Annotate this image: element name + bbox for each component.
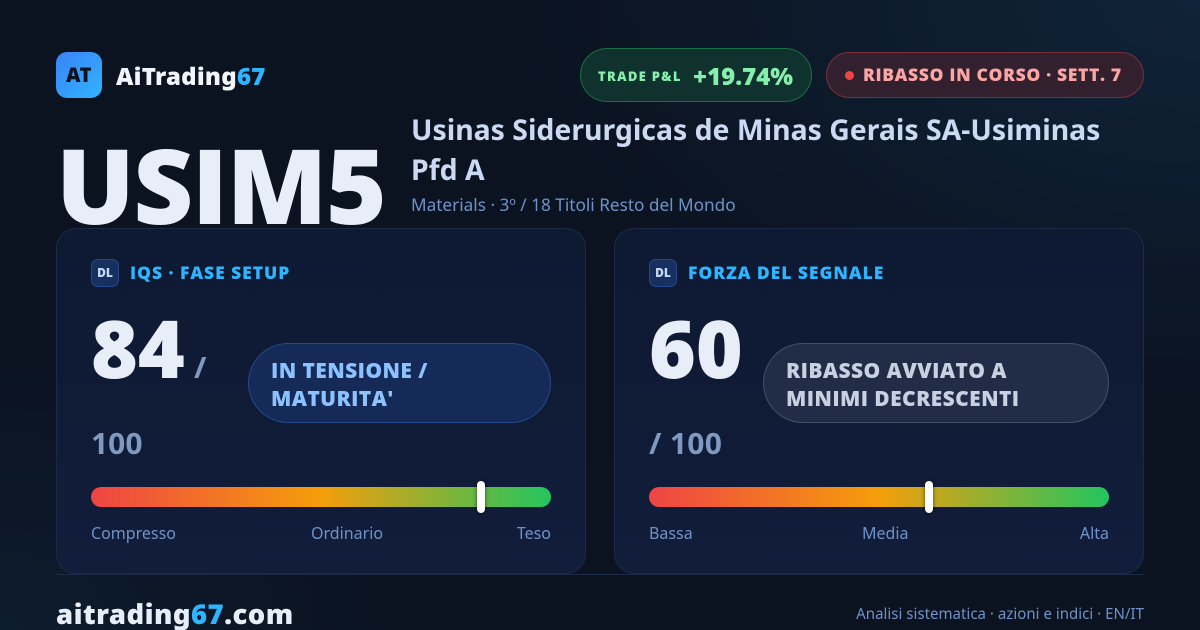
score denominator: / 100: [649, 422, 722, 463]
gauge label low: Compresso: [91, 522, 176, 544]
score slash: /: [194, 346, 206, 387]
gradient gauge: [91, 487, 551, 507]
company name: Pfd A: [411, 151, 485, 189]
status pill: MINIMI DECRESCENTI: [786, 385, 1020, 413]
badge: market status: [826, 52, 1144, 98]
panel: signal strength: [614, 228, 1144, 574]
gauge marker: [925, 481, 933, 513]
gauge label low: Bassa: [649, 522, 693, 544]
footer tagline: Analisi sistematica · azioni e indici · EN/IT: [856, 604, 1144, 624]
status pill: [763, 343, 1109, 423]
status pill: IN TENSIONE /: [271, 357, 428, 385]
gradient gauge: [649, 487, 1109, 507]
gauge marker: [477, 481, 485, 513]
gauge label high: Teso: [517, 522, 551, 544]
footer rule: [56, 574, 1144, 575]
company name: Usinas Siderurgicas de Minas Gerais SA-Usiminas: [411, 111, 1100, 149]
sector line: Materials · 3º / 18 Titoli Resto del Mondo: [411, 194, 736, 217]
panel heading: IQS · FASE SETUP: [130, 261, 290, 285]
gauge label mid: Media: [862, 522, 908, 544]
company name: [411, 111, 1100, 189]
score denominator: 100: [91, 422, 142, 463]
panel: IQS: [56, 228, 586, 574]
icon: DL: [91, 259, 119, 287]
gauge label high: Alta: [1080, 522, 1109, 544]
brand logo: [56, 52, 102, 98]
gauge label mid: Ordinario: [311, 522, 383, 544]
status pill: [248, 343, 551, 423]
icon: DL: [649, 259, 677, 287]
badge: market status: RIBASSO IN CORSO · SETT. 7: [863, 63, 1122, 87]
badge: trade P&L: TRADE P&L: [598, 67, 682, 85]
badge: trade P&L: +19.74%: [693, 60, 793, 93]
status pill: MATURITA': [271, 385, 394, 413]
icon: DL: DL: [655, 264, 671, 281]
status pill: RIBASSO AVVIATO A: [786, 357, 1007, 385]
score: 84: [91, 293, 185, 402]
ticker: USIM5: [56, 114, 385, 255]
badge: trade P&L: [580, 48, 812, 102]
panel heading: FORZA DEL SEGNALE: [688, 261, 884, 285]
icon: DL: DL: [97, 264, 113, 281]
brand logo: AT: [66, 61, 92, 88]
score: 60: [649, 293, 743, 402]
brand name: AiTrading67: [116, 60, 266, 93]
